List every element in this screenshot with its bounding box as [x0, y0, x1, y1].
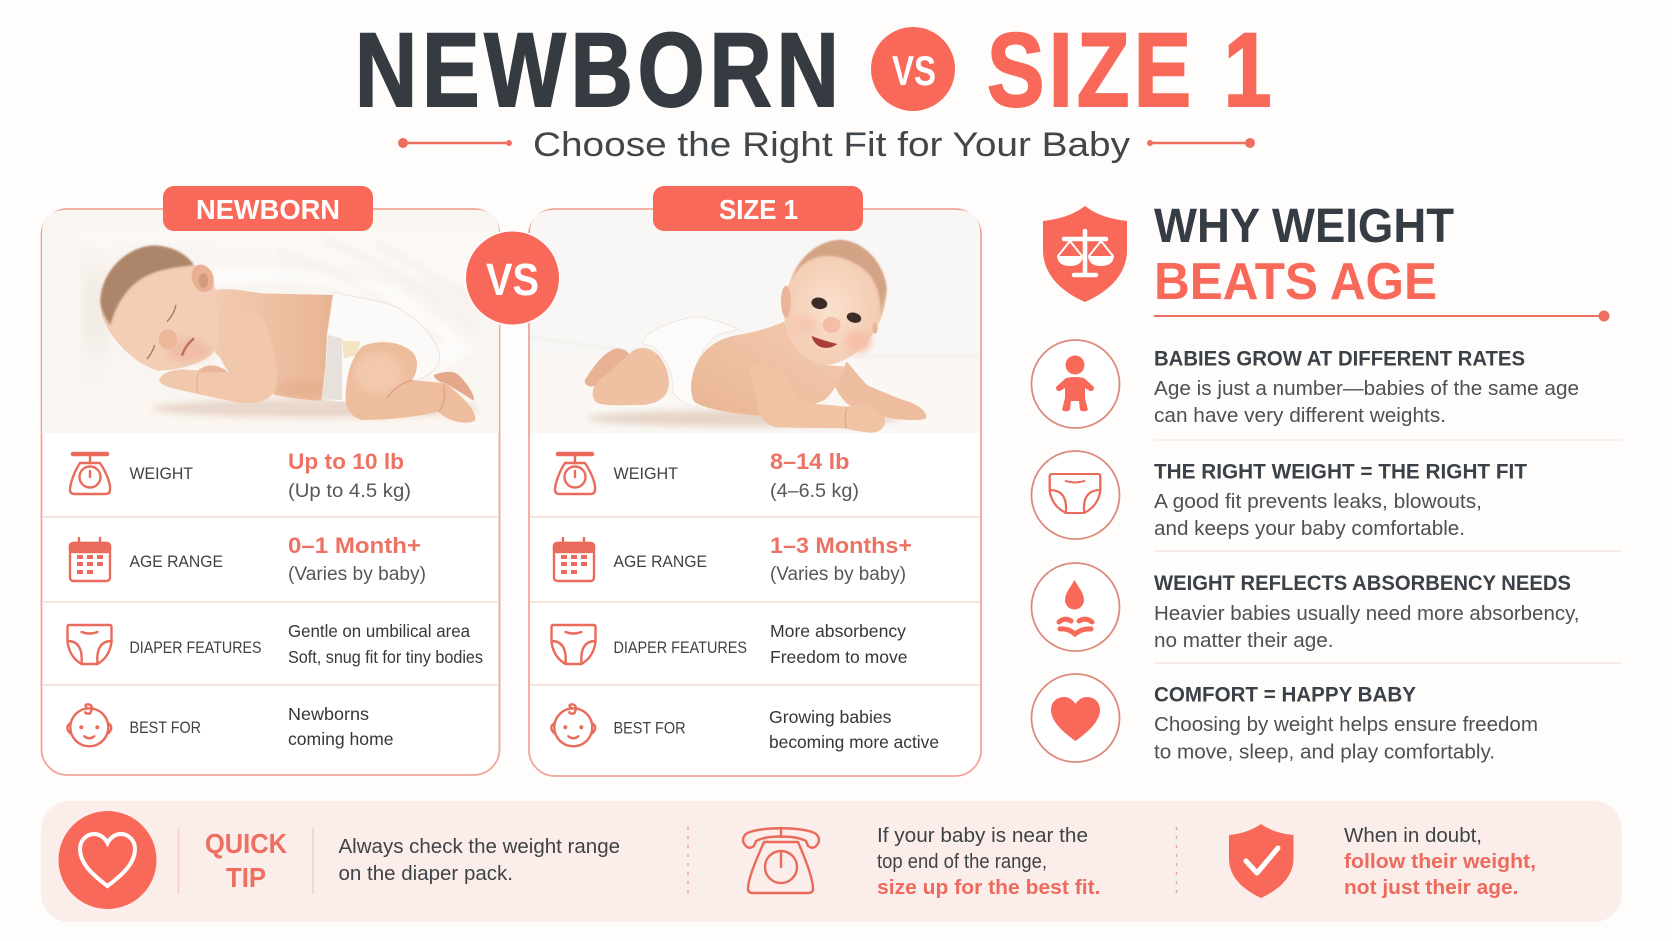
- heading: WHY WEIGHT: [1154, 200, 1454, 253]
- tip 1: [338, 836, 620, 885]
- icon: heart: [1032, 674, 1120, 762]
- item: right weight: [1032, 451, 1527, 540]
- item: right weight: A good fit prevents leaks, blowouts,: [1154, 491, 1482, 513]
- row: diaper features: DIAPER FEATURES: [614, 638, 747, 657]
- row: best for: becoming more active: [769, 732, 939, 752]
- icon: calendar: [554, 538, 594, 581]
- tip 1: on the diaper pack.: [338, 863, 513, 885]
- tip 2: size up for the best fit.: [877, 877, 1100, 899]
- item: right weight: THE RIGHT WEIGHT = THE RIGHT FIT: [1154, 460, 1527, 484]
- item: babies grow: Age is just a number—babies of the same age: [1154, 378, 1579, 400]
- heading: [1154, 200, 1454, 311]
- item: babies grow: can have very different weights.: [1154, 405, 1446, 427]
- photo: smiling baby: [530, 210, 980, 435]
- row: age range: 1–3 Months+: [770, 533, 912, 558]
- item: comfort: COMFORT = HAPPY BABY: [1154, 684, 1416, 706]
- tip 3: [1344, 825, 1536, 899]
- row: weight: (4–6.5 kg): [770, 481, 859, 502]
- subtitle: [398, 126, 1255, 164]
- badge: size 1: SIZE 1: [719, 194, 798, 225]
- item: absorbency: WEIGHT REFLECTS ABSORBENCY NEEDS: [1154, 572, 1571, 595]
- title: [355, 12, 1272, 129]
- tip 2: top end of the range,: [877, 851, 1047, 873]
- icon: scale: [555, 454, 595, 494]
- row: weight: WEIGHT: [130, 464, 193, 483]
- far arm: [835, 362, 926, 420]
- vs circle: [464, 230, 560, 326]
- quick tip label: QUICK: [205, 828, 287, 859]
- near arm: [757, 401, 886, 433]
- panel: quick tip bar: [41, 801, 1622, 922]
- icon: shield with balance: [1043, 206, 1127, 302]
- head: [100, 246, 219, 371]
- title: VS: [892, 47, 936, 94]
- torso: [215, 289, 333, 401]
- icon: heart in circle: [58, 811, 156, 909]
- icon: scale phone: [743, 828, 819, 893]
- row: best for: Growing babies: [769, 707, 892, 727]
- row: weight: [555, 449, 859, 502]
- head: [784, 240, 887, 365]
- tip 2: If your baby is near the: [877, 825, 1088, 847]
- item: absorbency: no matter their age.: [1154, 630, 1334, 652]
- panel: why weight beats age: [1032, 200, 1622, 764]
- row: age range: 0–1 Month+: [288, 533, 421, 558]
- diaper: [642, 317, 738, 407]
- vs circle: VS: [486, 254, 539, 305]
- icon: calendar: [70, 538, 110, 581]
- row: age range: [70, 533, 426, 585]
- item: babies grow: BABIES GROW AT DIFFERENT RATES: [1154, 348, 1525, 370]
- badge: size 1: [653, 186, 863, 231]
- tip 1: Always check the weight range: [338, 836, 620, 858]
- item: comfort: to move, sleep, and play comfortably.: [1154, 742, 1495, 764]
- tip 3: When in doubt,: [1344, 825, 1482, 847]
- row: age range: AGE RANGE: [614, 552, 707, 571]
- icon: diaper: [552, 625, 596, 664]
- icon: water drop: [1032, 563, 1120, 651]
- back foot: [434, 372, 474, 401]
- icon: diaper: [1032, 451, 1120, 539]
- row: best for: coming home: [288, 729, 394, 749]
- row: weight: (Up to 4.5 kg): [288, 481, 411, 502]
- row: best for: Newborns: [288, 704, 369, 724]
- panel: size 1 card: [529, 209, 981, 776]
- icon: baby face: [67, 704, 111, 746]
- row: best for: BEST FOR: [130, 718, 201, 737]
- title: SIZE 1: [987, 12, 1272, 129]
- row: weight: Up to 10 lb: [288, 449, 404, 474]
- item: babies grow: [1032, 340, 1579, 428]
- row: best for: [67, 704, 394, 749]
- row: age range: (Varies by baby): [288, 564, 426, 585]
- row: diaper features: Gentle on umbilical area: [288, 621, 470, 641]
- row: best for: BEST FOR: [614, 718, 686, 738]
- item: comfort: [1032, 674, 1538, 764]
- foot: [585, 348, 630, 387]
- quick tip label: [205, 828, 287, 893]
- row: diaper features: Soft, snug fit for tiny bodies: [288, 647, 483, 667]
- leg: [346, 342, 475, 423]
- item: right weight: and keeps your baby comfortable.: [1154, 518, 1465, 540]
- row: diaper features: [68, 621, 483, 667]
- row: diaper features: More absorbency: [770, 621, 906, 641]
- photo: sleeping newborn: [42, 210, 502, 435]
- torso: [691, 322, 845, 416]
- badge: newborn: NEWBORN: [196, 194, 340, 225]
- row: weight: 8–14 lb: [770, 449, 850, 474]
- tip 3: not just their age.: [1344, 877, 1518, 899]
- tip 2: [877, 825, 1100, 899]
- row: diaper features: DIAPER FEATURES: [130, 638, 262, 657]
- title: NEWBORN: [355, 12, 839, 129]
- row: age range: (Varies by baby): [770, 564, 906, 585]
- badge: newborn: [163, 186, 373, 231]
- row: diaper features: Freedom to move: [770, 647, 908, 667]
- item: comfort: Choosing by weight helps ensure freedom: [1154, 714, 1538, 736]
- heading: BEATS AGE: [1154, 253, 1437, 311]
- row: diaper features: [552, 621, 908, 667]
- icon: baby face: [551, 704, 595, 746]
- leg: [593, 348, 669, 405]
- row: age range: AGE RANGE: [130, 552, 223, 571]
- row: best for: [551, 704, 939, 752]
- icon: diaper: [68, 625, 112, 664]
- icon: baby: [1032, 340, 1120, 428]
- icon: scale: [70, 454, 110, 494]
- item: absorbency: [1032, 563, 1580, 652]
- quick tip label: TIP: [226, 862, 266, 893]
- icon: shield check: [1229, 824, 1294, 898]
- item: absorbency: Heavier babies usually need more absorbency,: [1154, 603, 1580, 625]
- row: age range: [554, 533, 912, 585]
- row: weight: WEIGHT: [614, 464, 678, 483]
- panel: newborn card: [42, 209, 502, 775]
- row: weight: [70, 449, 411, 502]
- tip 3: follow their weight,: [1344, 851, 1536, 873]
- diaper: [322, 292, 440, 402]
- arm: [159, 330, 276, 404]
- subtitle: Choose the Right Fit for Your Baby: [533, 126, 1130, 164]
